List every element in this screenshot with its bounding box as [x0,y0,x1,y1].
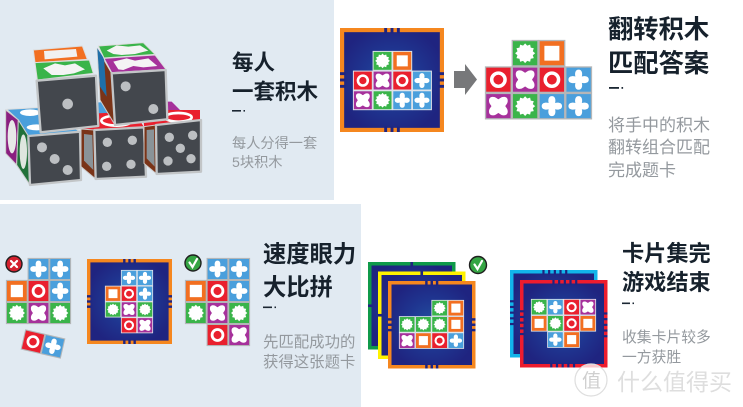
tiles on card [399,300,464,348]
die: one pip [33,46,98,132]
heading: step 4: 卡片集完 [622,241,711,266]
arrow [454,64,477,95]
text: step 2 description: 翻转组合匹配 [608,138,710,157]
watermark: logo and site name: 值 [582,370,601,392]
text: step 4 description: 一方获胜 [622,349,681,366]
heading: step 2 [608,16,709,78]
text: step 4 description: 收集卡片较多 [622,328,711,346]
heading: step 2: 匹配答案 [608,50,709,78]
card stack: opponent cards [510,270,608,368]
dash mark: step 1 [232,110,245,112]
die: five pips [143,110,201,174]
text: step 3 description [263,333,355,371]
dash mark: step 2 [609,87,623,89]
text: step 4 description [622,328,711,366]
watermark: logo and site name: 什么值得买 [617,369,732,395]
dash mark: step 4 [622,302,634,304]
illustration: five stacked dice blocks [6,43,201,185]
text: step 2 description: 完成题卡 [608,161,676,180]
die: two pips [97,43,167,125]
text: step 2 description [608,116,710,180]
text: step 1 description: 5块积木 [232,155,282,171]
matched blocks: step 2 [486,41,591,119]
card stack: won cards [368,262,476,368]
heading: step 3: 大比拼 [263,274,333,300]
heading: step 1: 每人 [232,51,276,75]
panel: step 3 background [0,204,361,407]
blocks: wrong arrangement [6,258,71,324]
blocks: correct arrangement [185,258,250,346]
panel: step 1 background [0,0,334,200]
badge: correct [470,256,486,274]
heading: step 1 [232,51,319,104]
tiles on card [353,51,431,110]
die: four pips [81,112,146,179]
text: step 1 description [232,135,317,171]
heading: step 4 [622,241,711,295]
loose blocks: leftover pair [21,330,65,358]
text: step 3 description: 先匹配成功的 [263,333,355,351]
heading: step 3 [263,241,356,300]
text: step 3 description: 获得这张题卡 [263,353,355,371]
dash mark: step 3 [263,306,276,308]
text: step 2 description: 将手中的积木 [608,116,710,135]
heading: step 4: 游戏结束 [622,270,711,295]
badge: wrong [6,256,22,272]
die: three pips [6,107,81,185]
badge: correct [185,255,201,271]
tiles on card [105,270,153,333]
heading: step 1: 一套积木 [232,80,319,104]
heading: step 2: 翻转积木 [608,16,709,44]
puzzle card: step 3 [87,259,172,344]
die: back bits [95,102,180,115]
tiles on card [531,299,596,347]
puzzle card: step 2 [340,28,444,132]
text: step 1 description: 每人分得一套 [232,135,317,152]
watermark: logo and site name [575,364,732,396]
heading: step 3: 速度眼力 [263,241,356,267]
